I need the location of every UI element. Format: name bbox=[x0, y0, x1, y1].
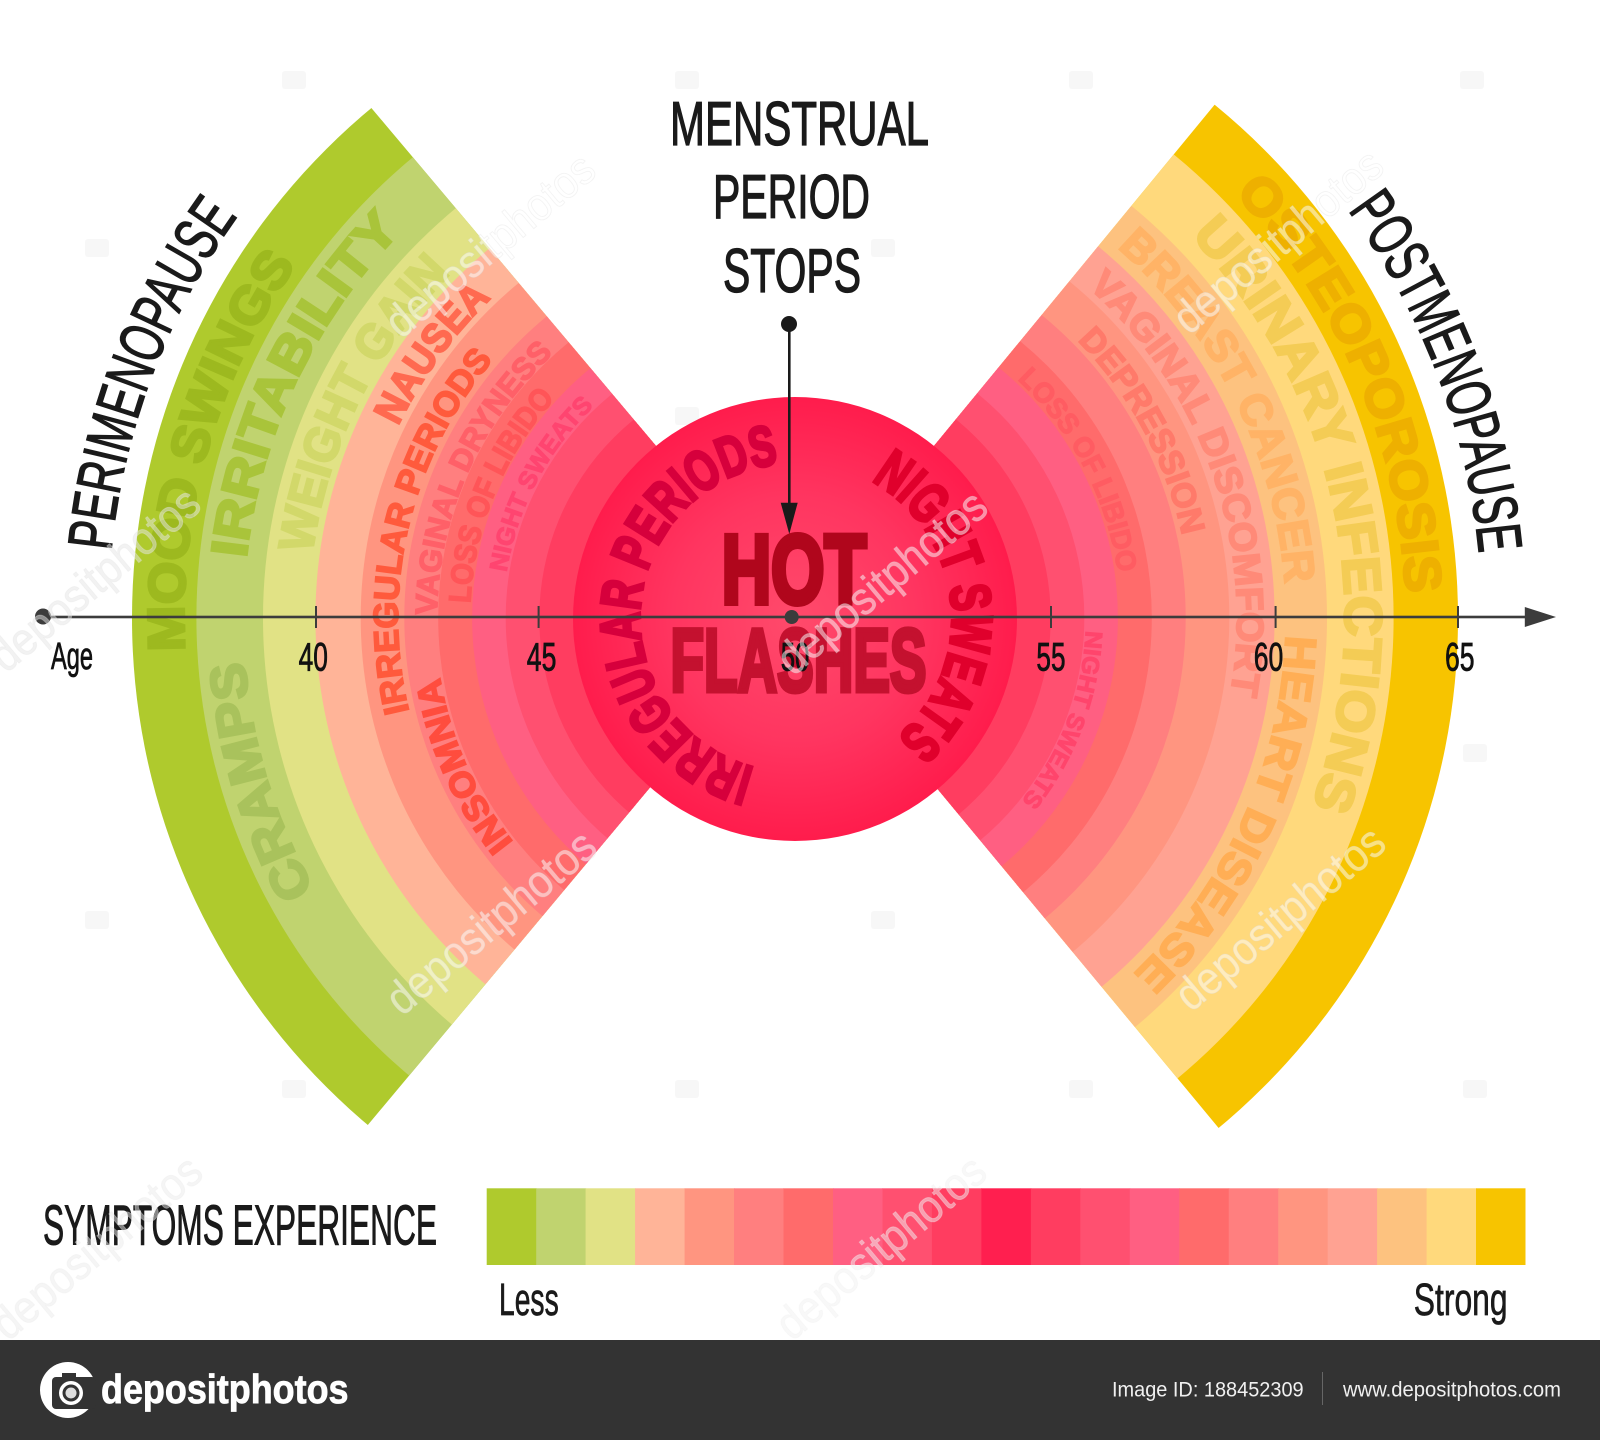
footer image id: Image ID: 188452309 bbox=[1112, 1379, 1304, 1402]
arrow: menstrual stop pointer bbox=[781, 316, 798, 534]
heading: menstrual period stops: STOPS bbox=[723, 237, 861, 306]
center symptom labels bbox=[599, 424, 994, 806]
watermarks bbox=[0, 138, 1395, 1350]
label: irregular periods: IRREGULAR PERIODS bbox=[372, 348, 490, 716]
center circle bbox=[573, 397, 1017, 841]
label: loss of libido: LOSS OF LIBIDO bbox=[448, 388, 551, 602]
label: insomnia: INSOMNIA bbox=[417, 677, 513, 856]
label: vaginal dryness: VAGINAL DRYNESS bbox=[414, 341, 550, 615]
watermarks: depositphotos bbox=[765, 1144, 996, 1350]
axis labels: 40 bbox=[299, 636, 328, 680]
label: depression: DEPRESSION bbox=[1078, 325, 1206, 534]
watermarks: depositphotos bbox=[766, 479, 997, 685]
label: right loss of libido: LOSS OF LIBIDO bbox=[1018, 366, 1136, 570]
watermarks: depositphotos bbox=[374, 142, 605, 348]
footer url: www.depositphotos.com bbox=[1342, 1379, 1561, 1402]
label: urinary infections: URINARY INFECTIONS bbox=[1197, 212, 1384, 813]
label: center night sweats: NIGHT SWEATS bbox=[872, 447, 994, 762]
label: right night sweats: NIGHT SWEATS bbox=[1024, 632, 1103, 808]
watermarks: depositphotos bbox=[1164, 815, 1395, 1021]
axis labels: Age bbox=[51, 636, 93, 678]
footer bar bbox=[0, 1340, 1600, 1440]
legend label: less: Less bbox=[499, 1274, 559, 1325]
heading: menstrual period stops: MENSTRUAL bbox=[670, 90, 929, 159]
label: night sweats: NIGHT SWEATS bbox=[489, 396, 592, 572]
legend label: strong: Strong bbox=[1414, 1274, 1508, 1325]
axis labels: 60 bbox=[1254, 636, 1283, 680]
background camera marks bbox=[85, 71, 1487, 1098]
label: osteoporosis: OSTEOPOROSIS bbox=[1242, 176, 1442, 592]
axis labels: 45 bbox=[527, 636, 556, 680]
age axis bbox=[35, 606, 1556, 628]
watermarks: depositphotos bbox=[375, 819, 606, 1025]
icon: footer camera logo bbox=[40, 1362, 96, 1418]
heading: menstrual period stops: PERIOD bbox=[713, 163, 870, 232]
label: vaginal discomfort: VAGINAL DISCOMFORT bbox=[1094, 266, 1264, 699]
label: irritability: IRRITABILITY bbox=[210, 205, 393, 556]
axis labels bbox=[51, 636, 1475, 680]
center title: hot flashes bbox=[670, 515, 926, 710]
label: nausea: NAUSEA bbox=[372, 284, 492, 425]
label: mood swings: MOOD SWINGS bbox=[146, 250, 292, 650]
watermarks: depositphotos bbox=[1162, 138, 1393, 344]
label: weight gain: WEIGHT GAIN bbox=[277, 251, 450, 549]
footer brand: depositphotos bbox=[101, 1366, 348, 1412]
axis labels: 50 bbox=[781, 636, 809, 680]
postmenopause symptom labels bbox=[1018, 176, 1442, 995]
center title: hot flashes: HOT bbox=[722, 515, 866, 624]
panel: perimenopause rings bbox=[132, 108, 656, 1125]
legend colour scale bbox=[487, 1188, 1526, 1265]
label: heart disease: HEART DISEASE bbox=[1133, 637, 1317, 995]
heading: symptoms experience: SYMPTOMS EXPERIENCE bbox=[43, 1194, 437, 1258]
axis labels: 65 bbox=[1445, 636, 1475, 680]
heading: postmenopause: POSTMENOPAUSE bbox=[1349, 187, 1523, 552]
axis labels: 55 bbox=[1036, 636, 1066, 680]
heading: perimenopause: PERIMENOPAUSE bbox=[68, 193, 238, 548]
perimenopause symptom labels bbox=[146, 205, 592, 900]
label: cramps: CRAMPS bbox=[210, 663, 309, 900]
label: breast cancer: BREAST CANCER bbox=[1118, 226, 1315, 584]
panel: postmenopause rings bbox=[934, 104, 1458, 1128]
center title: hot flashes: FLASHES bbox=[670, 610, 926, 710]
label: center irregular periods: IRREGULAR PERIODS bbox=[599, 424, 776, 806]
heading: menstrual period stops bbox=[670, 90, 929, 306]
